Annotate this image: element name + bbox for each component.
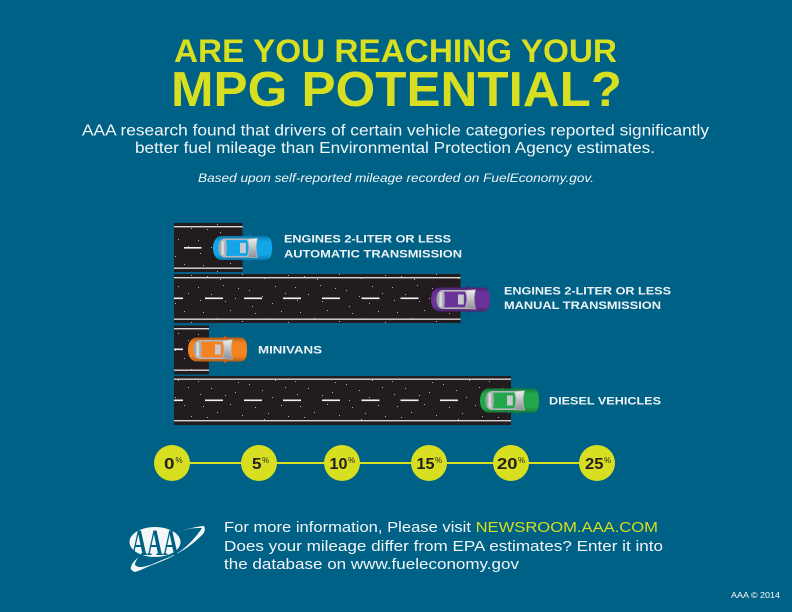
intro text bbox=[82, 122, 709, 157]
icon: green car bbox=[480, 386, 539, 414]
icon: blue car bbox=[213, 234, 272, 262]
percentage axis: % bbox=[348, 456, 355, 465]
AAA logo: AAA bbox=[132, 523, 179, 564]
label: engines 2-liter or less automatic transmission bbox=[284, 234, 462, 260]
footer call to action: Does your mileage differ from EPA estimates? Enter it into bbox=[224, 538, 663, 555]
percentage axis: 0 bbox=[164, 456, 174, 473]
icon: purple car bbox=[431, 286, 490, 314]
road bar: engines 2-liter or less manual bbox=[174, 274, 460, 323]
percentage axis: % bbox=[176, 456, 183, 465]
footer call to action: For more information, Please visit NEWSROOM.AAA.COM bbox=[224, 519, 658, 536]
percentage axis bbox=[154, 445, 615, 481]
title bbox=[171, 33, 622, 117]
source note: Based upon self-reported mileage recorded on FuelEconomy.gov. bbox=[198, 173, 594, 185]
percentage axis: 15 bbox=[416, 456, 435, 473]
title: ARE YOU REACHING YOUR bbox=[174, 33, 617, 69]
percentage axis: % bbox=[435, 456, 442, 465]
road bar: engines 2-liter or less automatic bbox=[174, 223, 242, 272]
bar chart: road bars bbox=[174, 223, 511, 425]
percentage axis: % bbox=[604, 456, 611, 465]
icon: orange car bbox=[188, 336, 247, 364]
percentage axis: 10 bbox=[330, 456, 348, 473]
footer call to action: the database on www.fueleconomy.gov bbox=[224, 556, 520, 573]
road bar: diesel vehicles bbox=[174, 376, 511, 425]
intro text: AAA research found that drivers of certain vehicle categories reported significantly bbox=[82, 122, 709, 140]
percentage axis: % bbox=[518, 456, 525, 465]
copyright: AAA © 2014 bbox=[731, 591, 781, 600]
label: engines 2-liter or less manual transmission bbox=[504, 286, 671, 312]
intro text: better fuel mileage than Environmental Protection Agency estimates. bbox=[135, 140, 655, 157]
title: MPG POTENTIAL? bbox=[171, 62, 622, 117]
percentage axis: % bbox=[262, 456, 269, 465]
percentage axis: 5 bbox=[252, 456, 262, 473]
percentage axis: 25 bbox=[585, 456, 604, 473]
label: diesel vehicles: DIESEL VEHICLES bbox=[549, 396, 661, 408]
road bar: minivans bbox=[174, 326, 209, 374]
percentage axis: 20 bbox=[497, 456, 518, 473]
footer call to action bbox=[224, 519, 663, 573]
label: minivans: MINIVANS bbox=[258, 344, 322, 356]
label: engines 2-liter or less automatic transmission: ENGINES 2-LITER OR LESS bbox=[284, 234, 451, 246]
label: engines 2-liter or less automatic transmission: AUTOMATIC TRANSMISSION bbox=[284, 248, 462, 260]
label: engines 2-liter or less manual transmission: ENGINES 2-LITER OR LESS bbox=[504, 286, 671, 298]
label: engines 2-liter or less manual transmission: MANUAL TRANSMISSION bbox=[504, 300, 661, 312]
